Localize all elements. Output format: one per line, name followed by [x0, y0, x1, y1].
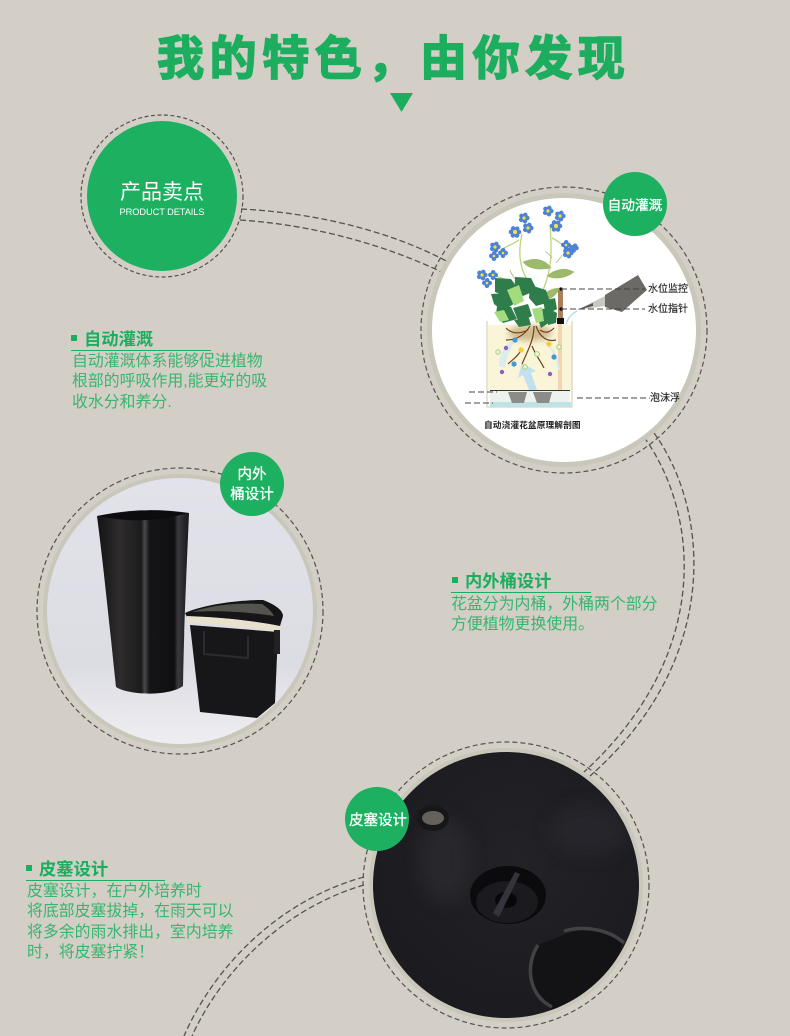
flowers — [479, 208, 576, 286]
leaves — [491, 251, 574, 328]
text block: inner and outer pot — [451, 571, 658, 633]
body: 时，将皮塞拧紧！ — [27, 944, 154, 961]
text block: self watering — [71, 329, 267, 411]
connector: top-left circle to right circle — [240, 209, 450, 273]
bullet — [452, 577, 458, 583]
body: 自动灌溉体系能够促进植物 — [72, 353, 263, 370]
body — [451, 595, 658, 633]
badge: self watering: 自动灌溉 — [608, 198, 663, 213]
icon: down triangle — [390, 93, 413, 112]
badge: inner and outer pot — [220, 452, 284, 516]
bullet — [26, 865, 32, 871]
body: 方便植物更换使用。 — [451, 616, 594, 633]
nutrient dots — [496, 337, 561, 376]
connector: bottom circle to lower left — [184, 877, 364, 1036]
heading: 皮塞设计 — [39, 859, 108, 879]
heading: 内外桶设计 — [465, 571, 551, 591]
illustration layer: circles, connectors, photos — [36, 93, 708, 1036]
badge: self watering — [603, 172, 667, 236]
panel: inner and outer pot photo circle — [37, 468, 323, 754]
bullet — [71, 335, 77, 341]
panel: product details circle — [81, 115, 243, 277]
body: 收水分和养分. — [72, 394, 172, 411]
watering can — [566, 275, 647, 324]
tall outer pot — [97, 510, 189, 694]
underline — [26, 880, 165, 881]
panel: self-watering diagram circle — [421, 187, 707, 473]
connector: right circle to bottom circle — [584, 433, 694, 776]
badge: inner and outer pot: 内外 — [238, 466, 266, 483]
plant stems — [490, 225, 566, 290]
product details title: 产品卖点 — [120, 181, 204, 204]
body: 花盆分为内桶，外桶两个部分 — [451, 596, 658, 613]
diagram callouts: 水位指针 — [648, 302, 688, 315]
panel: rubber plug photo circle — [363, 742, 649, 1028]
product details subtitle: PRODUCT DETAILS — [120, 207, 204, 217]
badge: inner and outer pot: 桶设计 — [230, 486, 274, 503]
body — [72, 352, 267, 411]
badge: rubber plug: 皮塞设计 — [349, 811, 407, 829]
body: 将多余的雨水排出，室内培养 — [27, 924, 234, 941]
pot — [487, 321, 572, 407]
water gauge — [557, 287, 564, 324]
body — [27, 882, 234, 961]
roots — [506, 325, 556, 368]
underline — [71, 350, 211, 351]
plug — [470, 866, 546, 924]
badge: rubber plug — [345, 787, 409, 851]
small hole — [417, 805, 449, 831]
inner pot — [185, 600, 283, 718]
diagram callouts — [648, 282, 688, 404]
heading: 自动灌溉 — [84, 329, 153, 349]
body: 皮塞设计，在户外培养时 — [27, 883, 202, 900]
title: 我的特色，由你发现 — [157, 32, 630, 85]
plastic ring — [530, 928, 624, 1010]
diagram callouts: 水位监控 — [648, 282, 688, 295]
diagram caption: 自动浇灌花盆原理解剖图 — [484, 419, 581, 430]
body: 将底部皮塞拔掉，在雨天可以 — [27, 903, 234, 920]
underline — [451, 592, 591, 593]
body: 根部的呼吸作用,能更好的吸 — [72, 373, 267, 390]
diagram leader lines — [465, 289, 650, 403]
text block: rubber plug — [26, 859, 234, 961]
diagram callouts: 泡沫浮 — [650, 391, 680, 404]
